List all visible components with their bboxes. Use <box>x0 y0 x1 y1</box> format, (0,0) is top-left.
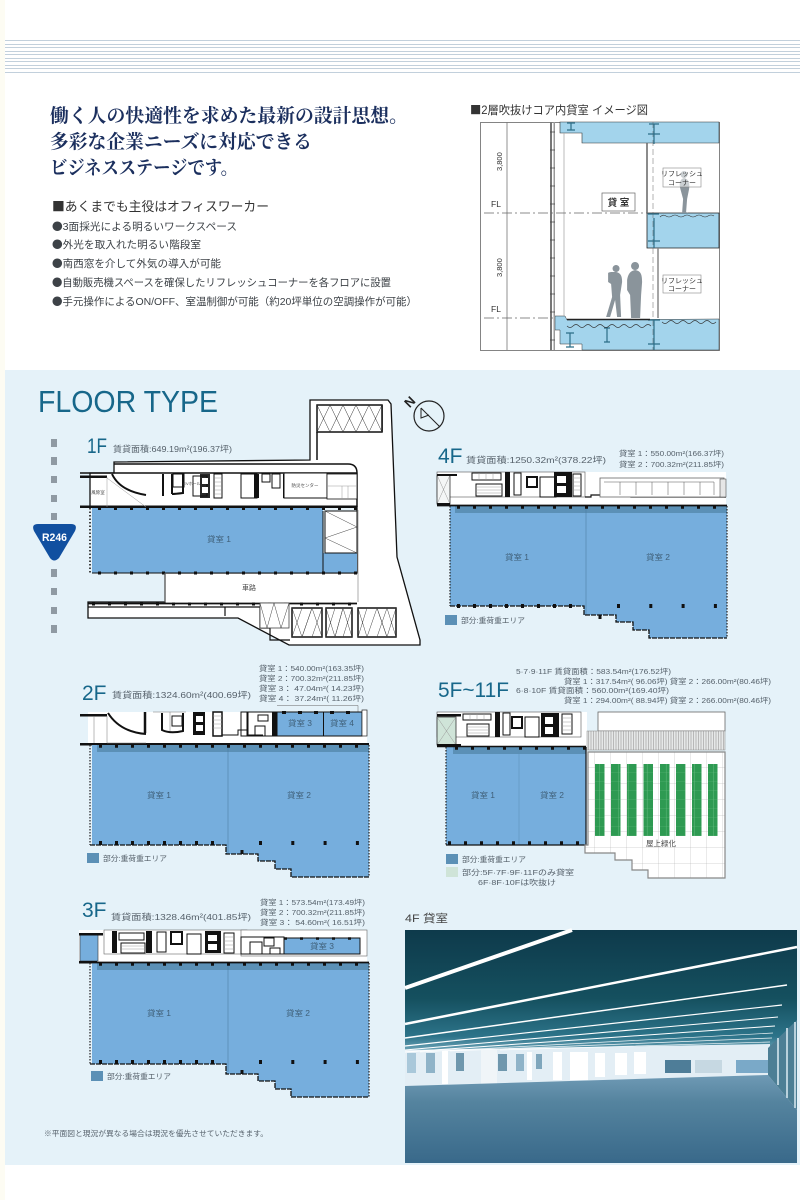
floor level lines <box>484 213 647 318</box>
label: rental room <box>602 193 635 211</box>
2F title <box>82 663 365 705</box>
3F room 3 <box>284 938 360 954</box>
label: rental room: 貸 室 <box>608 197 629 209</box>
compass <box>401 393 444 431</box>
label: refresh corner upper: コーナー <box>668 179 696 187</box>
roof garden grid <box>585 752 725 878</box>
2F core <box>80 706 369 746</box>
1F upper X bays <box>317 405 382 432</box>
R246 road sign <box>33 524 76 560</box>
3F right wing <box>241 930 367 956</box>
floor type heading: FLOOR TYPE <box>38 384 218 419</box>
2F title: 貸室 3： 47.04m²( 14.23坪) <box>259 683 365 693</box>
5F core <box>437 712 587 747</box>
1F title: 賃貸面積:649.19m²(196.37坪) <box>113 444 232 454</box>
feature list: ●手元操作によるON/OFF、室温制御が可能（約20坪単位の空調操作が可能） <box>52 294 417 309</box>
floor plan 4F <box>437 445 727 638</box>
1F small labels: EVホール <box>183 481 201 486</box>
feature list: ●自動販売機スペースを確保したリフレッシュコーナーを各フロアに設置 <box>52 275 391 290</box>
3F floor plate <box>79 962 369 1097</box>
main heading <box>50 104 408 179</box>
5F legend heavy load <box>446 854 526 864</box>
main heading: ビジネスステージです。 <box>50 157 238 179</box>
FL markers: FL <box>491 199 501 209</box>
feature list: ●3面採光による明るいワークスペース <box>52 219 237 234</box>
5F title: 6·8·10F 賃貸面積：560.00m²(169.40坪) <box>516 685 670 695</box>
4F legend <box>445 615 525 625</box>
roof hatched band <box>587 731 725 750</box>
5F title: 貸室 1：294.00m²( 88.94坪) 貸室 2：266.00m²(80.46坪) <box>564 695 772 705</box>
3F title <box>82 897 366 927</box>
3F title: 貸室 1：573.54m²(173.49坪) <box>260 897 366 907</box>
3F title: 貸室 3： 54.60m²( 16.51坪) <box>260 917 366 927</box>
feature list <box>52 196 417 309</box>
2F room labels <box>147 790 312 800</box>
floor plan 2F <box>80 663 369 877</box>
R246 road sign: R246 <box>42 532 67 544</box>
1F small labels: 防災センター <box>292 482 319 489</box>
section diagram <box>480 122 720 350</box>
3F title: 賃貸面積:1328.46m²(401.85坪) <box>111 912 251 922</box>
feature list: ●外光を取入れた明るい階段室 <box>52 237 201 252</box>
window band <box>405 1044 770 1086</box>
3F legend: 部分:重荷重エリア <box>107 1071 171 1081</box>
top stripe band <box>5 40 800 72</box>
floor plan 1F <box>80 400 420 645</box>
4F title: 4F <box>438 445 463 468</box>
2F rooms 3 and 4: 貸室 4 <box>330 718 355 728</box>
ceiling lights <box>405 930 797 1052</box>
4F title: 貸室 2：700.32m²(211.85坪) <box>619 459 725 469</box>
middle slab <box>647 213 719 248</box>
2F title: 貸室 2：700.32m²(211.85坪) <box>259 673 365 683</box>
dimension 3800 lower: 3,800 <box>495 258 504 277</box>
1F core rooms <box>107 473 357 507</box>
3F title: 貸室 2：700.32m²(211.85坪) <box>260 907 366 917</box>
figures <box>606 171 689 318</box>
3F title: 3F <box>82 899 107 922</box>
4F title: 賃貸面積:1250.32m²(378.22坪) <box>466 455 606 465</box>
feature list: ■あくまでも主役はオフィスワーカー <box>52 196 269 215</box>
3F legend <box>91 1071 171 1081</box>
2F title: 貸室 1：540.00m²(163.35坪) <box>259 663 365 673</box>
1F lower X bays <box>260 603 396 637</box>
4F title <box>438 445 725 469</box>
upper slab <box>560 122 719 143</box>
floor plan 5F to 11F <box>437 666 772 887</box>
5F legend heavy load: 部分:重荷重エリア <box>462 854 526 864</box>
main heading: 働く人の快適性を求めた最新の設計思想。 <box>50 104 408 127</box>
5F room labels <box>471 790 565 800</box>
4F room labels <box>505 552 671 562</box>
5F floor plate <box>437 746 586 845</box>
FL markers: FL <box>491 304 501 314</box>
feature list: ●南西窓を介して外気の導入が可能 <box>52 256 222 271</box>
label: refresh corner upper <box>661 168 703 187</box>
1F building outline <box>88 400 420 645</box>
5F title <box>438 666 772 705</box>
section diagram title: ■2層吹抜けコア内貸室 イメージ図 <box>470 102 648 118</box>
1F inner building walls <box>80 405 382 507</box>
1F lower wall with columns <box>88 510 358 640</box>
4F legend: 部分:重荷重エリア <box>461 615 525 625</box>
2F rooms 3 and 4 <box>277 710 367 736</box>
1F elevator void <box>325 511 357 553</box>
floor decks <box>567 318 650 320</box>
floor <box>405 1075 797 1163</box>
right wall <box>768 1020 797 1110</box>
floor plan 3F <box>79 897 369 1097</box>
5F room labels: 貸室 2 <box>540 790 565 800</box>
4F right balcony <box>600 478 726 497</box>
1F small labels <box>91 481 319 496</box>
label: refresh corner lower: リフレッシュ <box>661 277 703 285</box>
2F title: 2F <box>82 682 107 705</box>
4F core <box>437 472 726 505</box>
5F room labels: 貸室 1 <box>471 790 496 800</box>
2F floor plate <box>90 745 369 877</box>
4F room labels: 貸室 2 <box>646 552 671 562</box>
5F legend partial rooms: 6F·8F·10Fは吹抜け <box>478 877 556 887</box>
5F title: 貸室 1：317.54m²( 96.06坪) 貸室 2：266.00m²(80.46坪) <box>564 676 772 686</box>
FL markers <box>491 199 501 314</box>
label: refresh corner lower <box>661 275 703 293</box>
2F rooms 3 and 4: 貸室 3 <box>288 718 313 728</box>
3F core <box>79 930 367 964</box>
3F room labels: 貸室 2 <box>286 1008 311 1018</box>
2F room labels: 貸室 2 <box>287 790 312 800</box>
5F title: 5F~11F <box>438 679 509 702</box>
photo: 4F rental room interior <box>405 930 797 1163</box>
dimension 3800 upper: 3,800 <box>495 152 504 171</box>
4F floor plate <box>437 506 727 638</box>
1F label rental room: 貸室 1 <box>207 534 232 544</box>
1F road label: 車路 <box>242 583 256 592</box>
2F title: 貸室 4： 37.24m²( 11.26坪) <box>259 693 365 703</box>
label: refresh corner lower: コーナー <box>668 285 696 293</box>
3F room labels <box>147 1008 311 1018</box>
main heading: 多彩な企業ニーズに対応できる <box>50 130 312 153</box>
panel: floor type <box>5 370 800 1165</box>
1F title <box>87 435 232 458</box>
1F title: 1F <box>87 435 107 458</box>
route marker dashes <box>51 439 57 633</box>
5F title: 5·7·9·11F 賃貸面積：583.54m²(176.52坪) <box>516 666 672 676</box>
2F legend: 部分:重荷重エリア <box>103 853 167 863</box>
roof garden label: 屋上緑化 <box>646 838 676 848</box>
5F legend partial rooms: 部分:5F·7F·9F·11Fのみ貸室 <box>462 867 575 877</box>
1F small labels: 風除室 <box>91 489 105 496</box>
2F legend <box>87 853 167 863</box>
roof upper box <box>598 712 725 731</box>
2F title: 賃貸面積:1324.60m²(400.69坪) <box>112 690 251 700</box>
lower slab <box>555 316 719 350</box>
I beams <box>566 123 660 350</box>
compass: N <box>401 393 418 410</box>
roof green planters <box>595 764 718 836</box>
label: refresh corner upper: リフレッシュ <box>661 170 703 178</box>
4F title: 貸室 1：550.00m²(166.37坪) <box>619 448 725 458</box>
photo caption: 4F 貸室 <box>405 911 448 925</box>
1F columns <box>98 508 357 573</box>
3F room 3: 貸室 3 <box>310 941 335 951</box>
3F room labels: 貸室 1 <box>147 1008 172 1018</box>
1F rental blue area <box>92 508 357 573</box>
footnote: ※平面図と現況が異なる場合は現況を優先させていただきます。 <box>44 1128 268 1138</box>
5F legend partial rooms <box>446 867 575 887</box>
2F room labels: 貸室 1 <box>147 790 172 800</box>
4F room labels: 貸室 1 <box>505 552 530 562</box>
